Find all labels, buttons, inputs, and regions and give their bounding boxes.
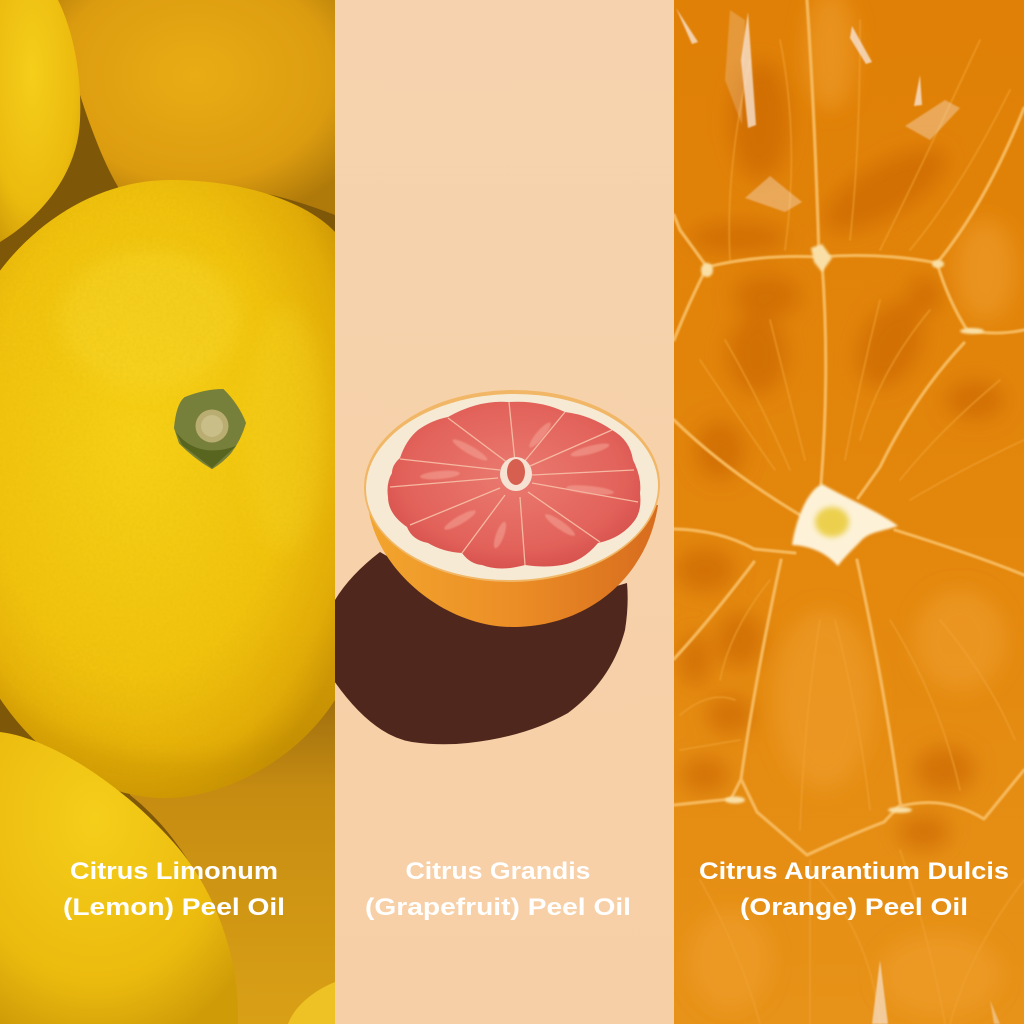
orange nodes (701, 244, 984, 813)
text: orange label (699, 858, 1009, 921)
grapefruit flesh (388, 402, 640, 568)
panel: lemon (0, 0, 340, 1024)
orange shading (675, 0, 1015, 1015)
grapefruit shadow (330, 552, 628, 744)
icon: lemon stem (175, 390, 245, 468)
grapefruit (362, 387, 662, 627)
panel: orange (674, 0, 1024, 1024)
lemon: top left (0, 0, 80, 242)
text: orange label: Citrus Aurantium Dulcis (699, 858, 1009, 885)
grapefruit pith (362, 387, 662, 585)
text: grapefruit label: Citrus Grandis (406, 858, 590, 885)
text: lemon label (63, 858, 285, 921)
orange core (792, 484, 898, 566)
orange membranes (674, 0, 1024, 1024)
lemon: lower right dark (130, 690, 335, 1024)
text: lemon label: (Lemon) Peel Oil (63, 894, 285, 921)
text: lemon label: Citrus Limonum (70, 858, 278, 885)
lemon: top right (55, 0, 335, 215)
lemon: bottom corner (288, 982, 335, 1024)
text: grapefruit label (365, 858, 631, 921)
panel: grapefruit (330, 0, 674, 1024)
lemon: main (0, 170, 340, 820)
grapefruit core (500, 457, 532, 491)
lemon: bottom left (0, 732, 238, 1024)
text: grapefruit label: (Grapefruit) Peel Oil (365, 894, 631, 921)
grapefruit peel (368, 505, 658, 627)
text: orange label: (Orange) Peel Oil (740, 894, 968, 921)
orange highlights (676, 8, 1000, 1024)
